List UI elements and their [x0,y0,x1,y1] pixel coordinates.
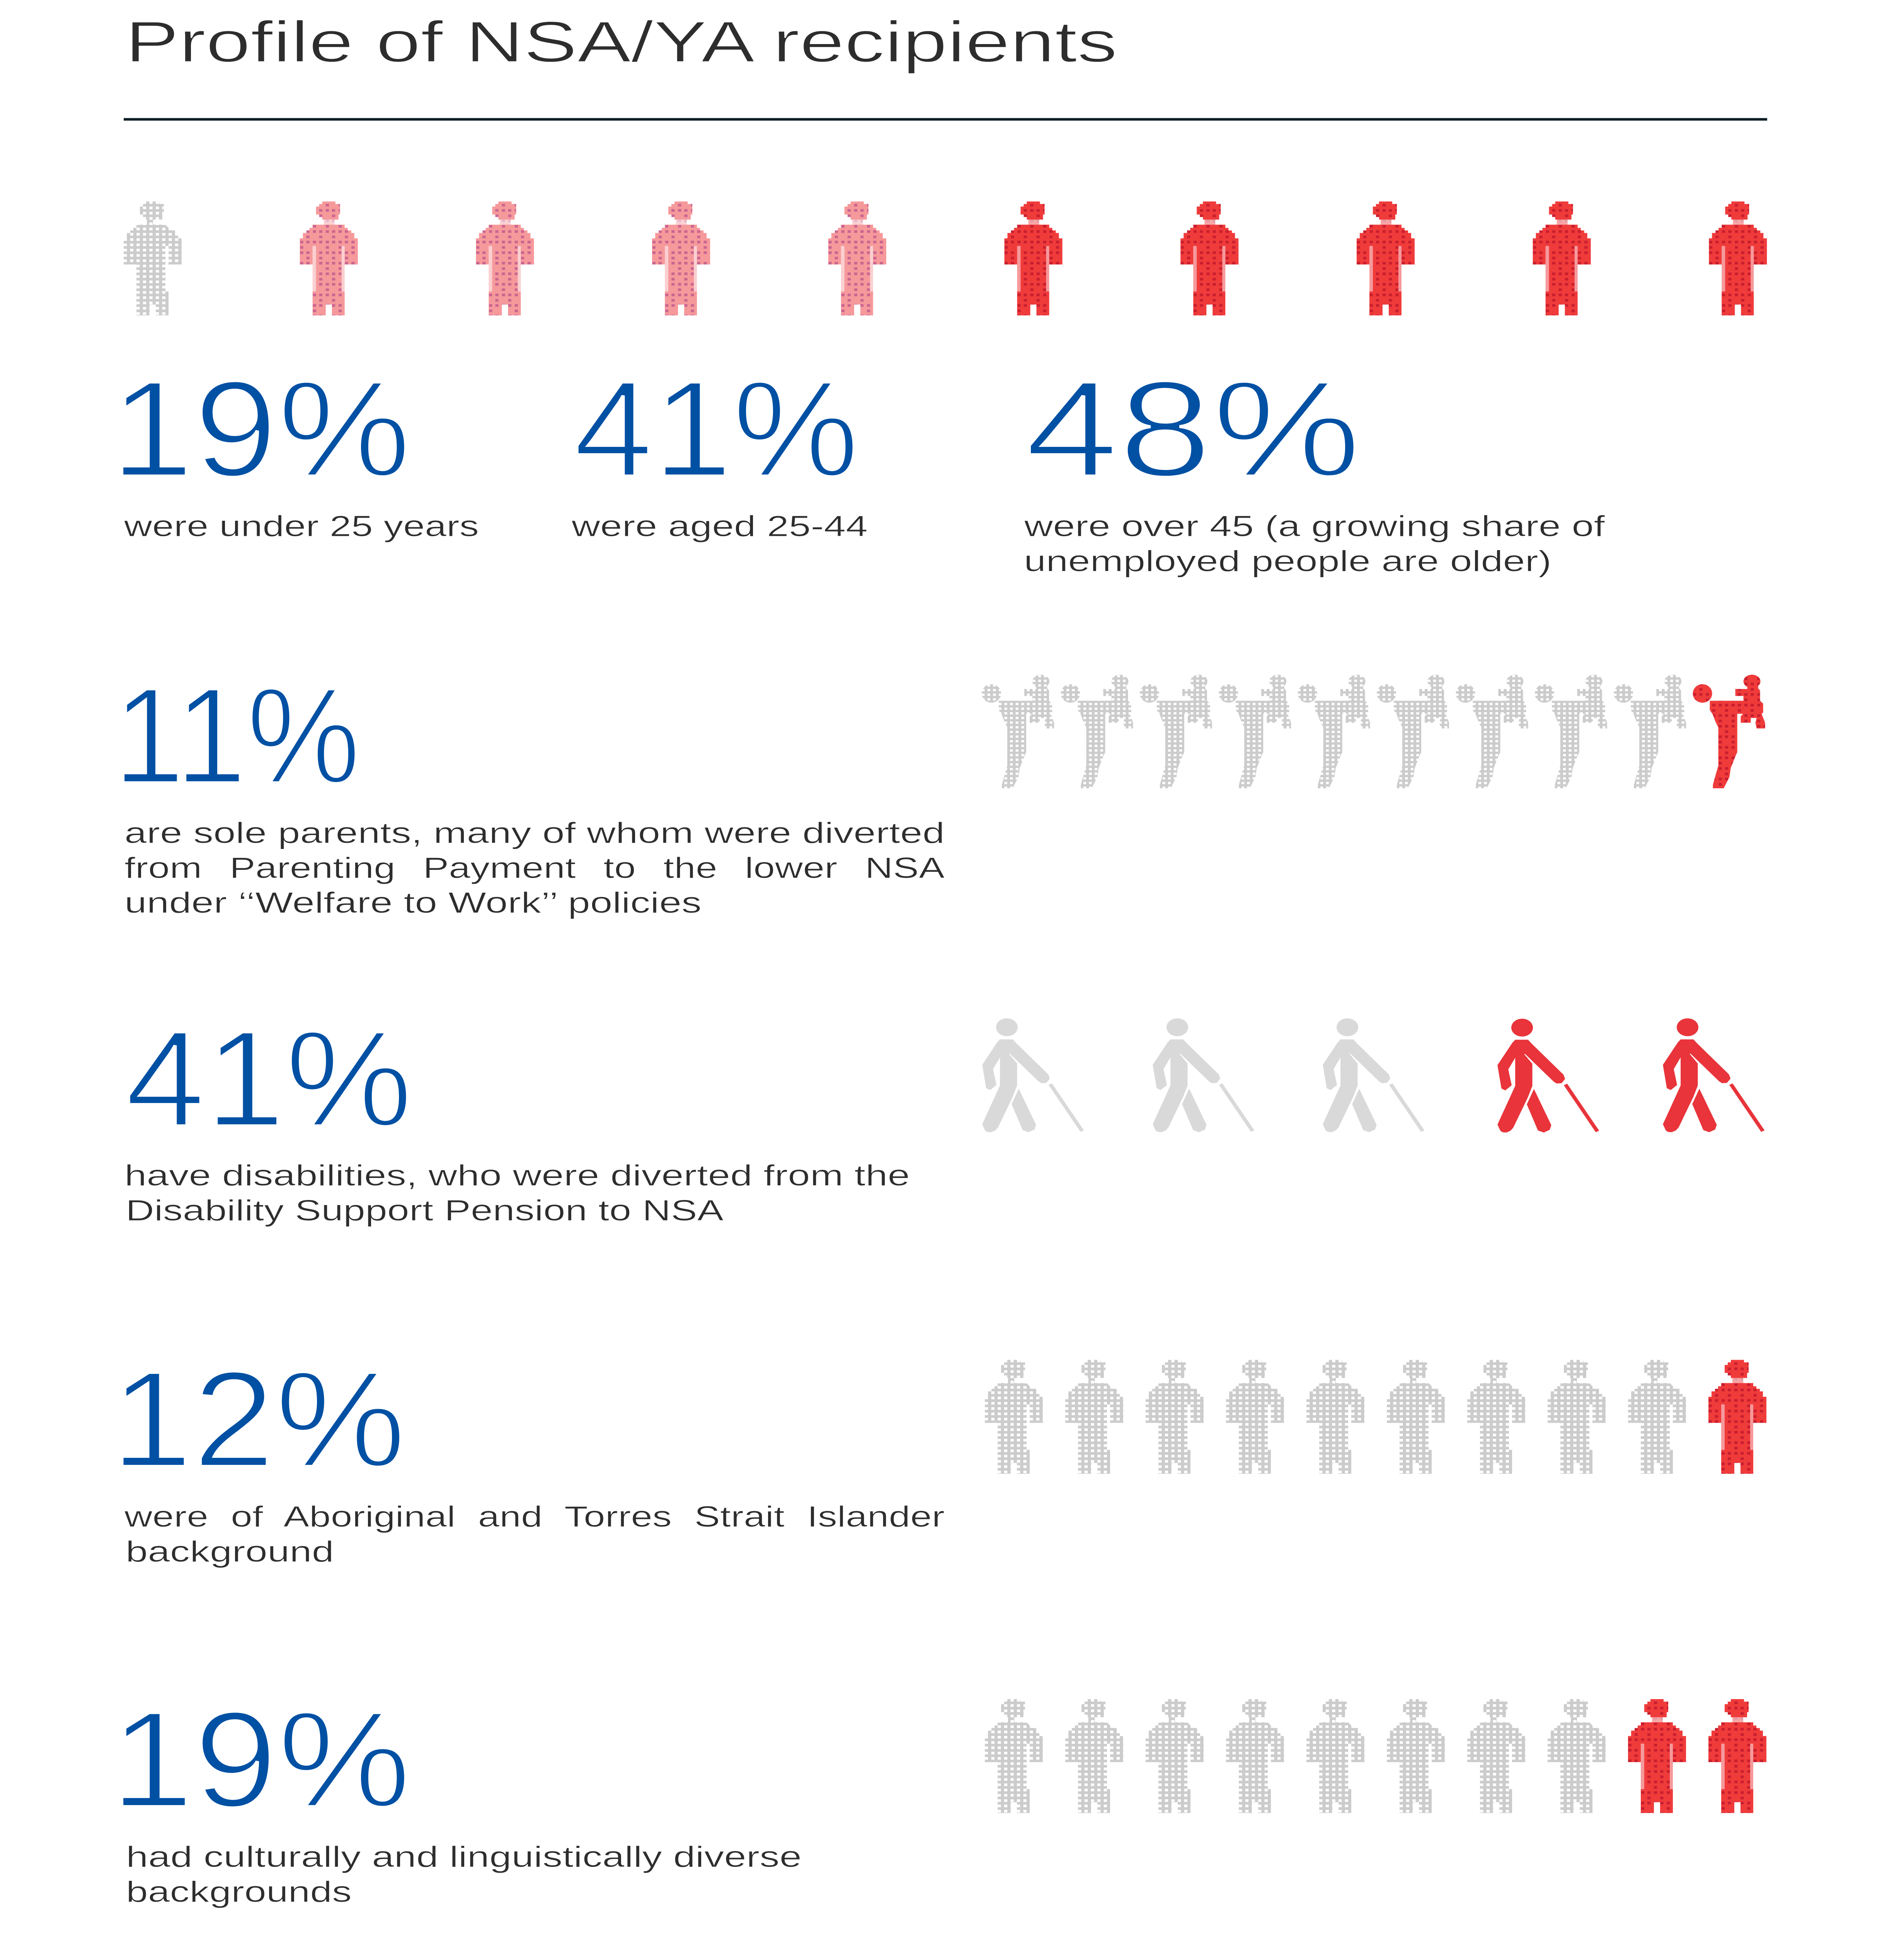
panel: age breakdown [110,201,1767,578]
statistic: 41%: 41% [125,1002,413,1155]
icon: grey person [1306,1360,1364,1474]
pictogram row: nine grey people, one red [985,1360,1766,1474]
icon: red person [1708,1360,1766,1474]
title: Profile of NSA/YA recipients [125,10,1117,74]
panel: Aboriginal and Torres Strait Islander [111,1343,1766,1568]
caption: disabilities: have disabilities, who were diverted from the [124,1159,910,1192]
caption: over 45: were over 45 (a growing share of [1024,510,1605,542]
icon: grey person [985,1699,1043,1813]
caption: culturally and linguistically diverse [126,1840,802,1908]
icon: red person with cane [1497,1019,1599,1132]
statistic: 11%: 11% [113,659,361,812]
icon: grey person [1548,1699,1606,1813]
icon: grey person, under 25 [124,201,182,315]
icon: grey person [1467,1360,1525,1474]
icon: grey parent and child [1219,675,1291,788]
icon: grey parent and child [1298,675,1370,788]
statistic: 12%: 12% [111,1343,406,1496]
icon: red person, over 45 [1357,201,1415,315]
icon: red person, over 45 [1533,201,1591,315]
icon: red parent and child [1693,675,1765,788]
icon: grey parent and child [1535,675,1607,788]
caption: sole parents: are sole parents, many of whom were diverted [124,816,945,849]
icon: red person, over 45 [1709,201,1767,315]
icon: grey person with cane [1323,1018,1424,1132]
icon: grey person with cane [982,1018,1084,1132]
icon: grey parent and child [1456,675,1528,788]
icon: grey person [1387,1699,1445,1813]
caption: culturally and linguistically diverse: backgrounds [126,1875,352,1908]
icon: grey parent and child [1140,675,1212,788]
icon: red person, over 45 [1180,201,1238,315]
icon: grey person [1467,1699,1525,1813]
statistic: 19%: 19% [110,353,411,505]
pictogram row: ten parents carrying children [982,675,1765,788]
icon: grey person [1146,1699,1204,1813]
icon: grey parent and child [982,675,1054,788]
caption: aged 25-44: were aged 25-44 [571,510,868,542]
panel: culturally and linguistically diverse [110,1683,1766,1908]
caption: over 45 [1024,510,1605,578]
caption: sole parents: from Parenting Payment to the lower NSA [124,852,945,884]
icon: grey person [1226,1360,1284,1474]
panel: disabilities [124,1002,1764,1227]
icon: grey person [1548,1360,1606,1474]
icon: pink person, aged 25-44 [828,201,886,315]
statistic: 41%: 41% [574,353,859,505]
caption: sole parents: under ‘‘Welfare to Work’’ policies [124,886,702,919]
icon: red person [1708,1699,1766,1813]
icon: grey parent and child [1377,675,1449,788]
icon: grey person [1387,1360,1445,1474]
icon: grey parent and child [1061,675,1133,788]
title divider rule [124,118,1767,121]
icon: grey person [1226,1699,1284,1813]
icon: grey person [985,1360,1043,1474]
caption: Aboriginal and Torres Strait Islander: were of Aboriginal and Torres Strait Islander [124,1500,945,1533]
caption: over 45: unemployed people are older) [1024,545,1551,578]
caption: under 25: were under 25 years [124,510,479,542]
icon: red person, over 45 [1004,201,1062,315]
icon: pink person, aged 25-44 [652,201,710,315]
caption: disabilities: Disability Support Pension to NSA [126,1194,724,1227]
caption: culturally and linguistically diverse: had culturally and linguistically diverse [126,1840,802,1873]
icon: grey person [1306,1699,1364,1813]
icon: grey person [1065,1360,1123,1474]
icon: grey person [1146,1360,1204,1474]
pictogram row: ten people by age group [124,201,1767,315]
icon: grey person [1628,1360,1686,1474]
icon: pink person, aged 25-44 [476,201,534,315]
caption: Aboriginal and Torres Strait Islander: background [126,1535,334,1568]
caption: disabilities [124,1159,910,1227]
icon: red person with cane [1663,1018,1764,1132]
statistic: 19%: 19% [110,1683,411,1836]
pictogram row: five people with canes [982,1018,1764,1132]
caption: sole parents [124,816,945,919]
icon: pink person, aged 25-44 [300,201,358,315]
icon: grey person with cane [1153,1018,1254,1132]
statistic: 48%: 48% [1025,353,1361,505]
panel: sole parents [113,659,1765,919]
caption: Aboriginal and Torres Strait Islander [124,1500,945,1568]
icon: red person [1628,1699,1686,1813]
icon: grey parent and child [1614,675,1686,788]
pictogram row: eight grey people, two red [985,1699,1766,1813]
icon: grey person [1065,1699,1123,1813]
